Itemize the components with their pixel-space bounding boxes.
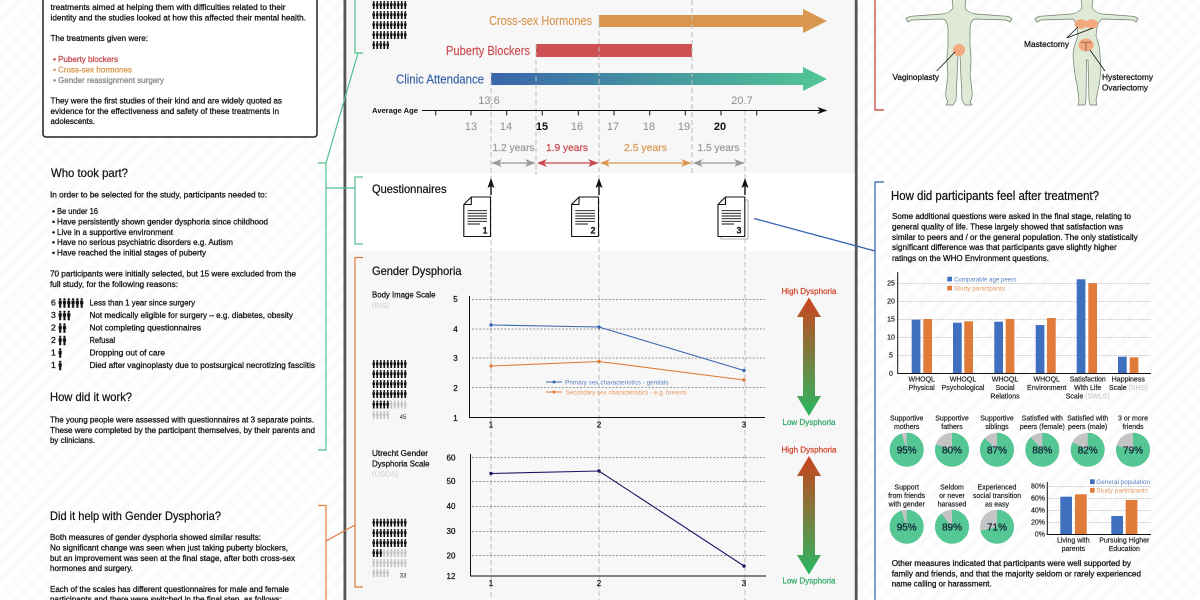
- pie: seldom or never harassed: 89%: [942, 522, 962, 534]
- figure: mastectomy and hysterectomy body: Ovariectomy: [1102, 84, 1148, 92]
- list: exclusion reasons with person icons: 1: [51, 348, 56, 358]
- section: how did it work: The young people were assessed with questionnaires at 3 separate points.: [50, 414, 314, 424]
- chart: body image scale: 2: [453, 384, 458, 393]
- section: did it help with gender dysphoria: hormones and surgery.: [50, 563, 133, 573]
- pie: support from friends with gender: 95%: [897, 522, 917, 534]
- pie: supportive siblings: siblings: [985, 424, 1009, 431]
- pie: support from friends with gender: from friends: [888, 493, 926, 500]
- legend: [546, 380, 686, 396]
- chart: utrecht gender dysphoria scale: 60: [447, 454, 456, 462]
- timeline: average age axis: 19: [678, 121, 690, 133]
- timeline: durations between questionnaires: 1.9 years: [546, 142, 588, 154]
- timeline: durations between questionnaires: 1.5 years: [698, 142, 740, 154]
- list: exclusion reasons with person icons: [51, 298, 316, 370]
- section: how did participants feel after treatment: How did participants feel after treatment?: [891, 189, 1099, 203]
- chart: utrecht gender dysphoria scale: 2: [597, 579, 602, 588]
- figure: mastectomy and hysterectomy body: Hysterectomy: [1102, 73, 1153, 82]
- section: how did participants feel after treatment: Some additional questions were asked in the final stage, relating to: [892, 211, 1131, 221]
- pie: support from friends with gender: with gender: [888, 502, 925, 508]
- list: exclusion reasons with person icons: Not medically eligible for surgery – e.g. diabetes, obesity: [90, 310, 294, 320]
- timeline: dashed age guide lines: [491, 0, 745, 600]
- section: questionnaires: [372, 178, 748, 239]
- list: selection criteria: •: [52, 206, 55, 216]
- list: selection criteria: Live in a supportive environment: [57, 227, 174, 237]
- arrow: dysphoria scale bottom: [782, 446, 837, 586]
- section: gender dysphoria heading: Gender Dysphoria: [372, 264, 462, 278]
- bar chart: quality of life scores: 5: [889, 352, 893, 360]
- pie: support from friends with gender: [888, 484, 926, 544]
- list: selection criteria: •: [52, 248, 55, 258]
- pictogram: 45 respondents: [372, 360, 407, 421]
- list: treatments given: [53, 54, 165, 85]
- figure: mastectomy and hysterectomy body: Mastectomy: [1024, 40, 1069, 49]
- list: selection criteria: Have reached the initial stages of puberty: [57, 248, 207, 258]
- list: selection criteria: Have no serious psychiatric disorders e.g. Autism: [57, 237, 233, 247]
- pie: satisfied with peers male: 82%: [1078, 446, 1098, 456]
- arrows up to timeline: [488, 178, 748, 195]
- section: how did participants feel after treatment: general quality of life. These largely showed that satisfaction was: [892, 222, 1124, 232]
- section: did it help with gender dysphoria: [50, 509, 296, 600]
- category labels: Social: [995, 385, 1015, 392]
- icon: document 1: 1: [482, 226, 488, 236]
- list: selection criteria: [52, 206, 268, 258]
- arrow: dysphoria scale top: [782, 287, 837, 427]
- pie: social transition as easy: as easy: [985, 502, 1010, 508]
- pie: supportive fathers: fathers: [941, 424, 963, 431]
- bar chart: living with parents and higher education: Education: [1109, 546, 1140, 553]
- arrow: dysphoria scale bottom: High Dysphoria: [782, 446, 837, 454]
- chart: body image scale: 3: [742, 420, 747, 430]
- chart: body image scale: 5: [453, 295, 458, 304]
- list: selection criteria: •: [52, 216, 55, 226]
- chart: body image scale: (BIS): [372, 301, 390, 310]
- legend: [1090, 479, 1150, 495]
- bar chart: living with parents and higher education: Living with: [1057, 538, 1090, 544]
- timeline: average age axis: Average Age: [372, 106, 418, 115]
- category labels: Psychological: [942, 385, 985, 392]
- section: did it help with gender dysphoria: but an improvement was seen at the final stage, after both cross-sex: [50, 553, 296, 563]
- bar chart: quality of life scores: 20: [887, 298, 895, 306]
- section: did it help with gender dysphoria: No significant change was seen when just taking puberty blockers,: [50, 542, 288, 552]
- category labels: Relations: [990, 394, 1020, 400]
- list: treatments given: •: [53, 54, 56, 64]
- list: treatments given: •: [53, 64, 56, 74]
- blue connector bracket: [754, 182, 884, 600]
- legend: Primary sex characteristics - genitals: [565, 380, 668, 386]
- panel: about the studies: They were the first studies of their kind and are widely quoted as: [50, 96, 283, 106]
- legend: General population: [1096, 479, 1150, 486]
- closing text: other measures: Other measures indicated that participants were well supported by: [892, 558, 1132, 568]
- list: exclusion reasons with person icons: 2: [51, 335, 56, 345]
- list: treatments given: Cross-sex hormones: [58, 64, 133, 74]
- pictogram: 33 respondents: [372, 519, 407, 580]
- pie: supportive fathers: Supportive: [935, 416, 969, 423]
- pie: seldom or never harassed: Seldom: [940, 484, 964, 492]
- pie: satisfied with peers female: Satisfied with: [1022, 416, 1063, 423]
- pie: supportive siblings: Supportive: [980, 416, 1014, 423]
- section: how did it work: How did it work?: [50, 390, 132, 404]
- bar chart: living with parents and higher education: 60%: [1031, 496, 1045, 502]
- chart: utrecht gender dysphoria scale: [372, 449, 766, 588]
- timeline: average age axis: 17: [607, 121, 619, 133]
- bar: puberty blockers: [446, 44, 692, 58]
- series: primary sex characteristics: [489, 323, 746, 372]
- timeline: average age axis: 18: [643, 121, 655, 133]
- category labels: Scale (SWLS): [1066, 394, 1110, 400]
- list: exclusion reasons with person icons: Died after vaginoplasty due to postsurgical necrotizing fasciitis: [90, 360, 316, 370]
- list: exclusion reasons with person icons: Dropping out of care: [90, 348, 165, 358]
- list: exclusion reasons with person icons: 3: [51, 310, 56, 320]
- pie: social transition as easy: Experienced: [978, 484, 1017, 492]
- pie: social transition as easy: [973, 484, 1021, 544]
- pictogram: 33 respondents: 33: [400, 574, 407, 580]
- timeline: average age axis: 20: [714, 121, 726, 133]
- closing text: other measures: family and friends, and that the majority seldom or rarely experienced: [892, 568, 1141, 578]
- orange connector brackets: [318, 258, 363, 600]
- pie: supportive mothers: Supportive: [890, 416, 924, 423]
- pie: supportive fathers: [935, 416, 969, 467]
- timeline: average age axis: 15: [536, 121, 548, 133]
- closing text: other measures: name calling or harassment.: [892, 578, 992, 588]
- pie: supportive mothers: [890, 416, 924, 467]
- section: who took part: [50, 166, 316, 370]
- category labels: Satisfaction: [1070, 376, 1106, 384]
- timeline: average age axis: 14: [500, 121, 512, 133]
- section: did it help with gender dysphoria: Both measures of gender dysphoria showed similar results:: [50, 532, 261, 542]
- chart: body image scale: 4: [453, 325, 458, 334]
- category labels: Scale (SHS): [1109, 385, 1148, 392]
- closing text: other measures: [892, 558, 1141, 588]
- chart: utrecht gender dysphoria scale: Dysphoria Scale: [372, 460, 430, 468]
- legend: Comparable age peers: [954, 276, 1017, 284]
- legend: Study participants: [1096, 488, 1149, 495]
- bar chart: living with parents and higher education: 80%: [1031, 484, 1045, 490]
- pie: satisfied with peers female: peers (female): [1020, 424, 1065, 431]
- section: did it help with gender dysphoria: Did it help with Gender Dysphoria?: [50, 509, 221, 523]
- section: questionnaires: Questionnaires: [372, 182, 447, 196]
- pie: 3 or more friends: [1116, 416, 1150, 467]
- list: exclusion reasons with person icons: 2: [51, 322, 56, 332]
- icon: document 2: [572, 197, 598, 236]
- timeline: treatment bars: [396, 0, 827, 91]
- category labels: WHOQL: [950, 376, 976, 384]
- bar chart: quality of life scores: 0: [889, 371, 893, 378]
- bar chart: quality of life scores: [887, 272, 1151, 400]
- green connector brackets: [318, 0, 363, 450]
- panel: about the studies: evidence for the effectiveness and safety of these treatments in: [50, 106, 279, 116]
- panel: about the studies: treatments aimed at helping them with difficulties related to their: [50, 2, 286, 12]
- pie: supportive mothers: mothers: [894, 424, 920, 431]
- list: exclusion reasons with person icons: 6: [51, 298, 56, 308]
- chart: utrecht gender dysphoria scale: 12: [447, 572, 456, 581]
- icon: document 2: 2: [590, 226, 596, 236]
- section: how did participants feel after treatment: [891, 189, 1138, 263]
- list: selection criteria: •: [52, 237, 55, 247]
- chart: utrecht gender dysphoria scale: 1: [489, 579, 494, 588]
- chart: body image scale: Body Image Scale: [372, 290, 436, 300]
- category labels: Happiness: [1112, 376, 1145, 384]
- figure: vaginoplasty body: Vaginoplasty: [892, 73, 939, 82]
- pie: supportive siblings: 87%: [987, 446, 1007, 456]
- section: how did it work: These were completed by the participant themselves, by their parents and: [50, 425, 315, 435]
- chart: body image scale: 2: [597, 420, 602, 430]
- bar: clinic attendance: [396, 67, 827, 91]
- bar chart: quality of life scores: 10: [887, 334, 895, 342]
- arrow: dysphoria scale bottom: Low Dysphoria: [782, 576, 836, 586]
- bar: cross-sex hormones: Cross-sex Hormones: [489, 14, 592, 28]
- pie: social transition as easy: social transition: [973, 493, 1021, 500]
- section: how did participants feel after treatment: ratings on the WHO Environment questions.: [892, 253, 1049, 263]
- section: how did participants feel after treatment: significant difference was that participants gave slightly higher: [892, 242, 1117, 252]
- category labels: Physical: [909, 385, 935, 392]
- top participants pictogram: [372, 1, 407, 49]
- chart: utrecht gender dysphoria scale: 20: [447, 552, 456, 560]
- panel: about the studies: The treatments given were:: [50, 33, 148, 43]
- legend: Study participants: [954, 286, 1006, 292]
- panel: about the studies: [43, 0, 317, 137]
- legend: Secondary sex characteristics - e.g. breasts: [566, 390, 686, 396]
- bar: cross-sex hormones: [489, 9, 827, 33]
- timeline: durations between questionnaires: 2.5 years: [624, 142, 667, 154]
- list: exclusion reasons with person icons: Less than 1 year since surgery: [90, 298, 196, 308]
- icon: document 3 stack: 3: [736, 226, 742, 236]
- bar: puberty blockers: Puberty Blockers: [446, 44, 530, 58]
- panel: about the studies: identity and the studies looked at how this affected their mental health.: [50, 12, 306, 22]
- chart: utrecht gender dysphoria scale: 30: [447, 527, 456, 536]
- arrow: dysphoria scale top: High Dysphoria: [782, 287, 837, 296]
- pie: satisfied with peers male: [1067, 416, 1108, 467]
- bar chart: living with parents and higher education: parents: [1062, 546, 1085, 553]
- icon: document 1: [464, 197, 490, 236]
- section: did it help with gender dysphoria: Each of the scales has different questionnaires for male and female: [50, 584, 289, 594]
- category labels: WHOQL: [1033, 376, 1060, 384]
- category labels: Environment: [1027, 385, 1066, 392]
- figure: vaginoplasty body: [892, 0, 1012, 105]
- section: who took part: Who took part?: [51, 166, 128, 180]
- panel: central timeline column: [344, 0, 858, 600]
- chart: utrecht gender dysphoria scale: 3: [742, 579, 747, 588]
- pie: satisfied with peers male: Satisfied with: [1067, 416, 1108, 423]
- pie: 3 or more friends: friends: [1122, 424, 1144, 431]
- section: who took part: full study, for the following reasons:: [50, 279, 178, 289]
- chart: utrecht gender dysphoria scale: Utrecht Gender: [372, 449, 428, 458]
- list: selection criteria: Be under 16: [57, 206, 98, 216]
- section: how did participants feel after treatment: similar to peers and / or the general population. The only statistically: [892, 232, 1138, 242]
- arrow: dysphoria scale top: Low Dysphoria: [782, 418, 836, 427]
- bar chart: living with parents and higher education: Pursuing Higher: [1099, 538, 1150, 544]
- pictogram: 45 respondents: 45: [400, 415, 407, 421]
- list: exclusion reasons with person icons: Refusal: [90, 335, 115, 345]
- pie charts: support second row: [888, 484, 1021, 544]
- timeline: average age axis: 20.7: [731, 95, 753, 107]
- pie: satisfied with peers female: [1020, 416, 1065, 467]
- chart: body image scale: 1: [489, 420, 494, 430]
- bar chart: quality of life scores: 25: [887, 280, 895, 288]
- pie: seldom or never harassed: or never: [939, 493, 966, 500]
- bar chart: living with parents and higher education: 20%: [1031, 520, 1045, 526]
- pie: seldom or never harassed: harassed: [938, 502, 967, 508]
- bar chart: quality of life scores: 15: [887, 316, 895, 324]
- section: who took part: 70 participants were initially selected, but 15 were excluded from the: [50, 268, 296, 278]
- chart: utrecht gender dysphoria scale: 50: [447, 477, 456, 486]
- category labels: With Life: [1074, 385, 1101, 392]
- icon: document 3 stack: [718, 197, 748, 239]
- section: who took part: In order to be selected for the study, participants needed to:: [50, 190, 267, 200]
- list: exclusion reasons with person icons: 1: [51, 360, 56, 370]
- pie: 3 or more friends: 3 or more: [1118, 416, 1148, 423]
- pie: supportive fathers: 80%: [942, 446, 962, 456]
- pie charts: support first row: [890, 416, 1150, 467]
- timeline: durations between questionnaires: 1.2 years: [492, 142, 534, 154]
- bar chart: living with parents and higher education: 0%: [1035, 532, 1045, 538]
- list: selection criteria: Have persistently shown gender dysphoria since childhood: [57, 216, 268, 226]
- legend: [947, 276, 1017, 292]
- pie: satisfied with peers male: peers (male): [1068, 424, 1107, 431]
- timeline: average age axis: [372, 95, 828, 133]
- pie: support from friends with gender: Support: [894, 484, 919, 492]
- pie: social transition as easy: 71%: [987, 522, 1007, 534]
- panel: about the studies: adolescents.: [50, 116, 95, 126]
- timeline: average age axis: 13.6: [478, 95, 500, 107]
- chart: body image scale: 3: [453, 354, 458, 363]
- pie: 3 or more friends: 79%: [1123, 446, 1143, 456]
- timeline: average age axis: 13: [465, 121, 477, 133]
- series: UGDS score: [489, 469, 746, 568]
- chart: utrecht gender dysphoria scale: (UGDS): [372, 470, 399, 478]
- pie: supportive siblings: [980, 416, 1014, 467]
- category labels: WHOQL: [992, 376, 1018, 384]
- section: how did it work: by clinicians.: [50, 435, 95, 445]
- timeline: durations between questionnaires: [492, 142, 744, 167]
- pie: satisfied with peers female: 88%: [1032, 446, 1052, 456]
- list: treatments given: Gender reassignment surgery: [58, 75, 165, 85]
- list: exclusion reasons with person icons: Not completing questionnaires: [90, 322, 202, 332]
- series: secondary sex characteristics: [489, 360, 746, 382]
- bar chart: living with parents and higher education: [1031, 479, 1151, 553]
- list: selection criteria: •: [52, 227, 55, 237]
- section: how did it work: [50, 390, 315, 445]
- bar chart: living with parents and higher education: 40%: [1031, 508, 1045, 514]
- category labels: [908, 376, 1148, 400]
- list: treatments given: •: [53, 75, 56, 85]
- pie: seldom or never harassed: [935, 484, 969, 544]
- category labels: WHOQL: [908, 376, 935, 384]
- bar: clinic attendance: Clinic Attendance: [396, 72, 484, 86]
- chart: body image scale: [372, 290, 765, 430]
- list: treatments given: Puberty blockers: [58, 54, 119, 64]
- timeline: average age axis: 16: [571, 121, 583, 133]
- pie: supportive mothers: 95%: [897, 446, 917, 456]
- chart: body image scale: 1: [453, 414, 458, 423]
- figure: mastectomy and hysterectomy body: [1024, 0, 1153, 105]
- chart: utrecht gender dysphoria scale: 40: [447, 502, 456, 511]
- red surgery bracket: [875, 0, 884, 110]
